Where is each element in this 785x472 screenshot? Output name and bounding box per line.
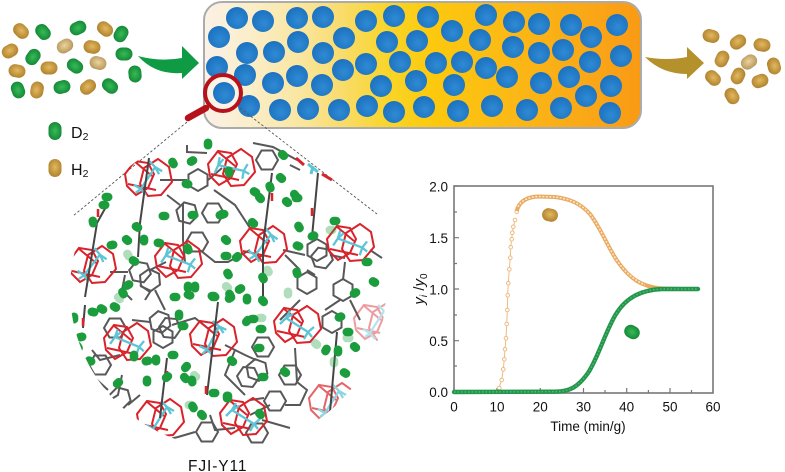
label: H2: H: [71, 162, 83, 179]
x-axis tick labels: [450, 400, 721, 414]
metal nodes: [69, 149, 401, 436]
x-axis tick labels: 20: [533, 400, 548, 414]
panel: separation column: [204, 2, 641, 128]
D2 curve: [454, 289, 698, 392]
legend: [48, 122, 89, 180]
framework linkers: [89, 143, 382, 442]
y-axis tick labels: 1.0: [429, 282, 448, 298]
outlet H2 molecules: [701, 28, 782, 107]
x-axis tick labels: 0: [450, 400, 458, 414]
icon: H2 molecule: [48, 159, 62, 177]
panel: FJI-Y11 framework view: [69, 138, 401, 442]
label: H2: 2: [83, 168, 89, 180]
axis ticks: [454, 186, 692, 393]
label: D2: D: [71, 125, 83, 142]
x-axis tick labels: 40: [619, 400, 634, 414]
faded D2 molecules: [112, 226, 353, 409]
x-axis tick labels: 30: [576, 400, 591, 414]
icon: D2 molecule: [48, 122, 62, 140]
label: D2: 2: [83, 131, 89, 143]
plot frame: [454, 186, 713, 393]
y-axis title: 0: [419, 273, 430, 279]
x-axis title: Time (min/g): [550, 419, 626, 434]
pillar rods: [83, 158, 337, 418]
y-axis tick labels: [429, 180, 448, 400]
y-axis tick labels: 0.5: [429, 334, 448, 349]
arrow: feed into column: [138, 46, 199, 79]
icon: H2 molecule on chart: [541, 207, 559, 223]
icon: magnifying glass: [188, 75, 241, 118]
y-axis title: y: [411, 296, 428, 306]
column body: [204, 2, 641, 128]
zoom guide lines: [73, 108, 377, 216]
H2 curve: [498, 196, 680, 390]
y-axis title: /: [411, 286, 428, 295]
icon: D2 molecule on chart: [622, 322, 642, 342]
y-axis tick labels: 2.0: [429, 180, 448, 194]
adsorbed D2 molecules: [70, 138, 381, 422]
x-axis tick labels: 10: [489, 400, 505, 414]
x-axis tick labels: 60: [705, 400, 721, 414]
y-axis tick labels: 0.0: [429, 385, 448, 400]
chart: breakthrough curves: [411, 180, 721, 434]
y-axis title: y: [411, 277, 428, 287]
y-axis title: i: [419, 294, 430, 297]
arrow: column outlet: [645, 47, 704, 79]
adsorbent beads: [206, 4, 632, 124]
feed gas mixture of D2 and H2: [0, 19, 142, 100]
y-axis tick labels: 1.5: [429, 231, 448, 246]
x-axis tick labels: 50: [662, 400, 678, 414]
